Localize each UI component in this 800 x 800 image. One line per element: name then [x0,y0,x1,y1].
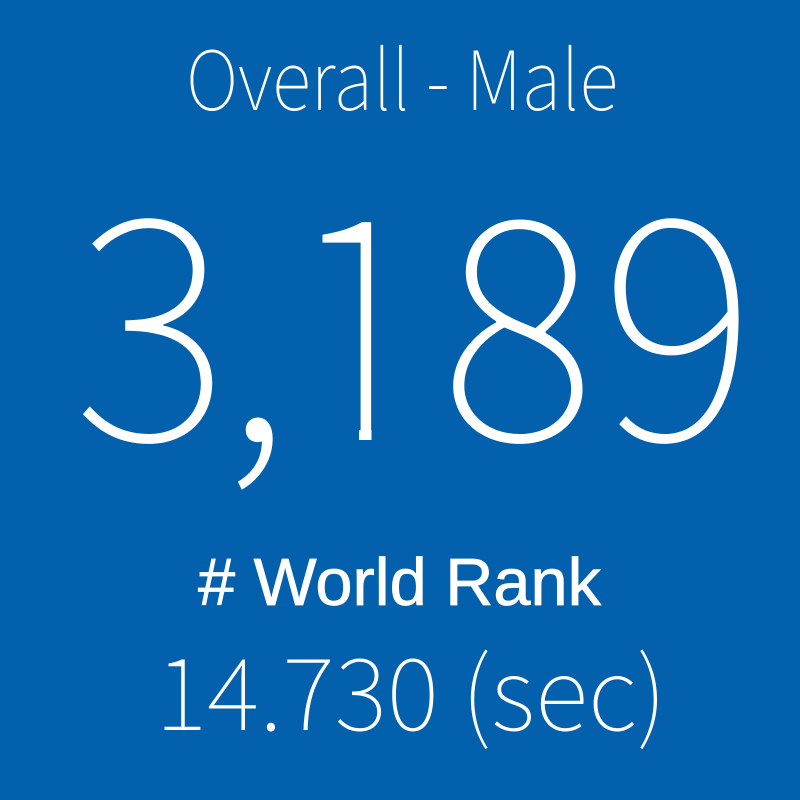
big number: rank: 3,189 [73,93,756,527]
label: world rank: # World Rank [198,545,601,620]
time value: 14.730 (sec) [155,614,667,759]
title: Overall - Male [186,15,618,134]
